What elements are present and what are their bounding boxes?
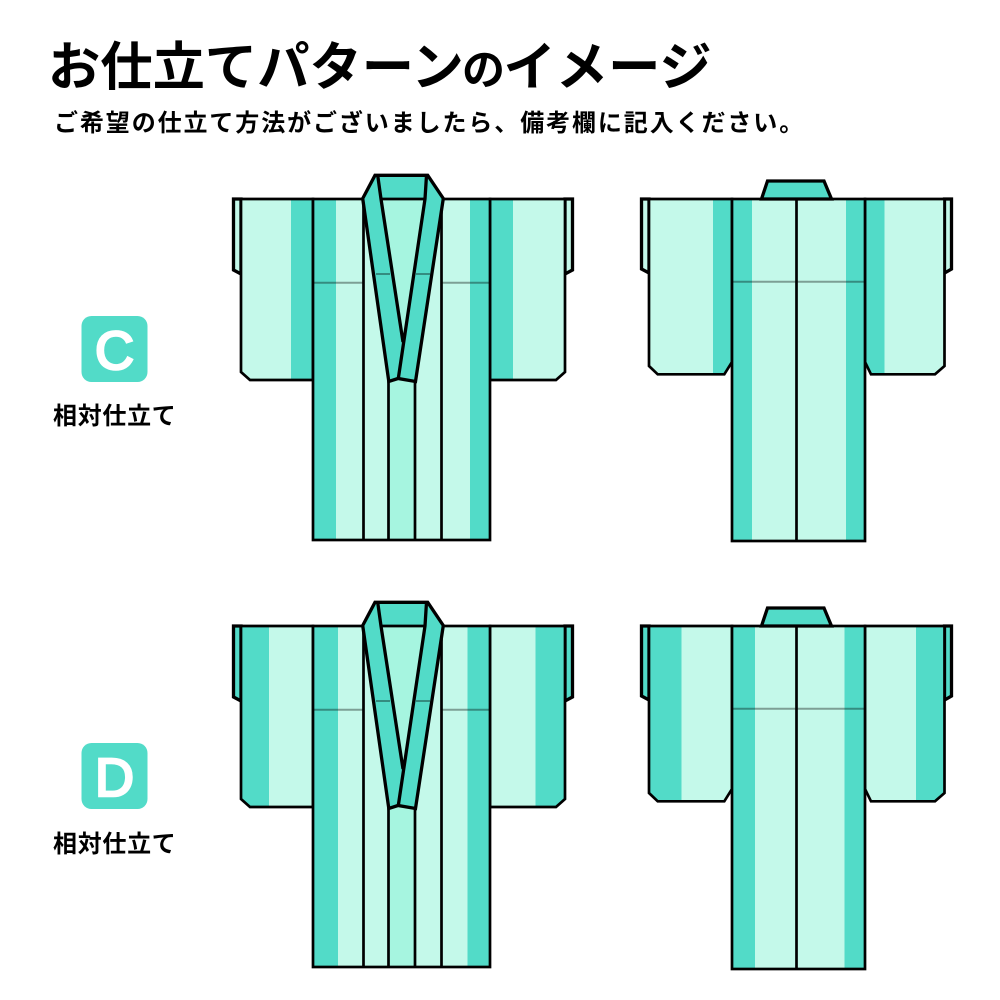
right tail: [565, 626, 572, 701]
title: イメージ: [504, 39, 712, 97]
right tail: [944, 626, 952, 700]
badge C: [82, 316, 148, 382]
title: の: [462, 47, 505, 95]
label C: 相対仕立て: [53, 403, 176, 430]
right sleeve: [490, 199, 565, 380]
subtitle: ご希望の仕立て方法がございましたら、備考欄に記入ください。: [54, 109, 805, 137]
body: [313, 626, 490, 967]
left sleeve: [649, 626, 732, 801]
label D: 相対仕立て: [53, 831, 176, 858]
left sleeve: [649, 199, 732, 374]
body: [313, 199, 490, 540]
collar: [363, 175, 443, 382]
badge D: [82, 743, 148, 809]
body: [732, 199, 865, 541]
left tail: [234, 199, 241, 274]
right tail: [944, 199, 952, 273]
kimono C back: [642, 181, 952, 541]
badge D: D: [95, 748, 134, 808]
right tail: [565, 199, 572, 274]
collar: [762, 608, 832, 626]
kimono C front: [234, 175, 572, 540]
left tail: [642, 199, 649, 273]
right sleeve: [490, 626, 565, 807]
collar: [762, 181, 832, 199]
right sleeve: [865, 199, 944, 374]
kimono D front: [234, 602, 572, 967]
badge C: C: [95, 321, 134, 381]
right sleeve: [865, 626, 944, 801]
left sleeve: [241, 199, 313, 380]
left sleeve: [241, 626, 313, 807]
kimono D back: [642, 608, 952, 969]
body: [732, 626, 865, 969]
left tail: [234, 626, 241, 701]
title: お仕立てパターン: [48, 39, 464, 97]
collar: [363, 602, 443, 808]
left tail: [642, 626, 649, 700]
